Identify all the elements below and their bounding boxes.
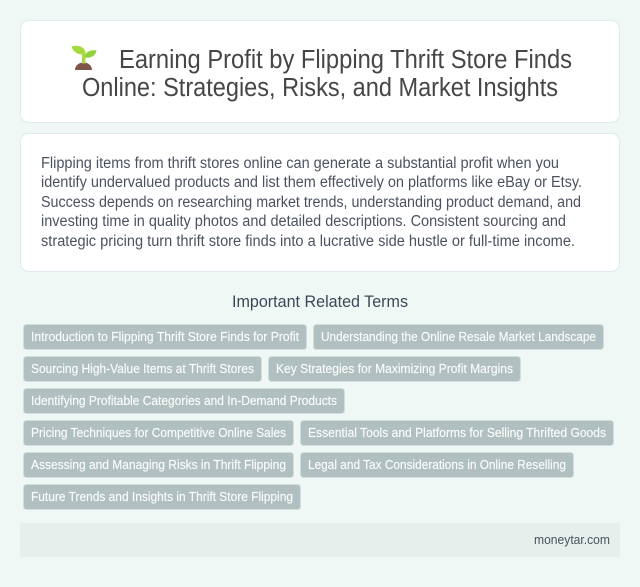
tag: introduction: Introduction to Flipping Thrift Store Finds for Profit [31,329,299,344]
tag: key strategies: Key Strategies for Maximizing Profit Margins [276,361,513,376]
tag: future trends [24,484,300,510]
tag: market landscape [314,324,604,350]
panel: title card [20,20,620,122]
tag: pricing: Pricing Techniques for Competitive Online Sales [31,425,286,440]
tag: key strategies [268,356,520,382]
tag: introduction [24,324,306,350]
tag: categories: Identifying Profitable Categories and In-Demand Products [31,393,337,408]
footer source: moneytar.com [534,532,610,547]
tag: sourcing: Sourcing High-Value Items at Thrift Stores [31,361,254,376]
tag: categories [24,388,344,414]
tag: market landscape: Understanding the Online Resale Market Landscape [321,329,596,344]
footer [20,523,620,557]
tag: future trends: Future Trends and Insights in Thrift Store Flipping [31,489,293,504]
heading: important related terms: Important Related Terms [232,292,408,311]
summary text: Flipping items from thrift stores online can generate a substantial profit when you [41,155,559,172]
tag: sourcing [24,356,262,382]
panel: summary card [20,134,620,272]
summary text [41,155,582,250]
tag: legal and tax [300,452,574,478]
summary text: strategic pricing turn thrift store finds into a lucrative side hustle or full-time income. [41,233,575,250]
tag: risks [24,452,294,478]
summary text: identify undervalued products and list them effectively on platforms like eBay or Etsy. [41,174,582,191]
summary text: investing time in quality photos and detailed descriptions. Consistent sourcing and [41,213,566,230]
tag: legal and tax: Legal and Tax Considerations in Online Reselling [308,457,566,472]
title: Online: Strategies, Risks, and Market Insights [82,74,558,102]
tag: tools: Essential Tools and Platforms for Selling Thrifted Goods [308,425,606,440]
title: Earning Profit by Flipping Thrift Store Finds [119,46,572,74]
summary text: Success depends on researching market trends, understanding product demand, and [41,194,581,211]
tag: risks: Assessing and Managing Risks in Thrift Flipping [31,457,286,472]
tag: pricing [24,420,294,446]
tag list [24,324,614,510]
tag: tools [300,420,614,446]
title [82,46,572,102]
icon: sprout [72,46,96,70]
